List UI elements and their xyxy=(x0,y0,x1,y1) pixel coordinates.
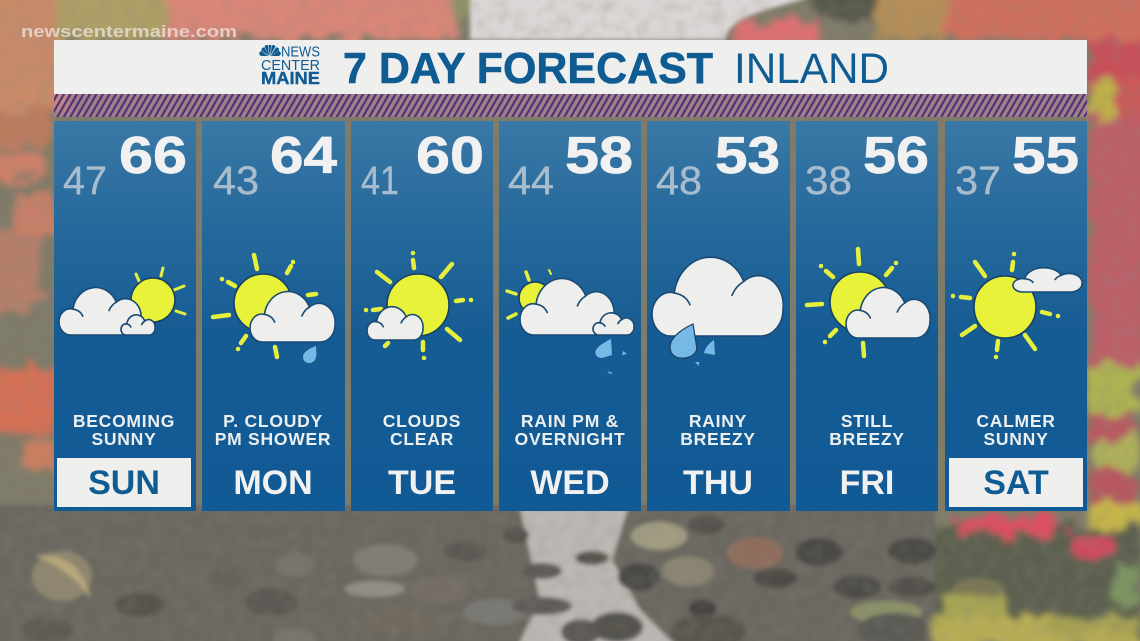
low temperature: 41 xyxy=(361,159,399,203)
logo: NBC News Center Maine xyxy=(259,44,320,88)
high temperature: 66 xyxy=(119,127,187,185)
watermark: newscentermaine.com: newscentermaine.com xyxy=(21,23,237,41)
panel: Monday: PM SHOWER xyxy=(215,429,331,449)
high temperature: 64 xyxy=(270,127,337,185)
icon: sun with thin cloud xyxy=(953,254,1082,357)
high temperature: 53 xyxy=(715,127,780,185)
logo: NBC News Center Maine: MAINE xyxy=(261,68,320,88)
title banner xyxy=(54,40,1087,94)
logo: NBC News Center Maine: CENTER xyxy=(261,57,320,74)
panel: Saturday: SUNNY xyxy=(983,429,1049,449)
high temperature: 56 xyxy=(863,127,929,185)
high temperature: 60 xyxy=(416,127,484,185)
icon: sun, cloud and shower xyxy=(213,255,335,363)
panel: Thursday: BREEZY xyxy=(680,429,756,449)
logo: NBC News Center Maine: NEWS xyxy=(281,44,320,60)
panel: Friday: BREEZY xyxy=(829,429,905,449)
low temperature: 44 xyxy=(508,159,554,203)
icon: sun behind clouds xyxy=(59,268,185,335)
panel: Saturday xyxy=(945,121,1087,511)
low temperature: 47 xyxy=(63,159,107,203)
panel: Tuesday: CLEAR xyxy=(390,429,454,449)
panel: Wednesday xyxy=(499,121,641,511)
low temperature: 37 xyxy=(955,159,1001,203)
heading: 7 day forecast: 7 DAY FORECAST xyxy=(343,44,713,93)
condition text: P. CLOUDY xyxy=(223,411,323,431)
hatched strip xyxy=(54,94,1087,117)
day label: TUE xyxy=(388,464,456,502)
panel: Sunday: SUNNY xyxy=(91,429,157,449)
condition text: STILL xyxy=(841,411,893,431)
panel: Sunday: SUN xyxy=(88,464,160,502)
panel: Monday xyxy=(202,121,345,511)
day label: MON xyxy=(233,464,313,502)
condition text: CALMER xyxy=(976,411,1056,431)
condition text: CLOUDS xyxy=(383,411,461,431)
panel: Thursday xyxy=(647,121,790,511)
panel: Wednesday: OVERNIGHT xyxy=(515,429,625,449)
day label box xyxy=(949,458,1083,507)
icon: clouds, sun and rain xyxy=(507,270,634,374)
high temperature: 58 xyxy=(565,127,633,185)
panel: Saturday: SAT xyxy=(983,464,1049,502)
icon: rain cloud xyxy=(652,257,783,366)
low temperature: 43 xyxy=(213,159,259,203)
day label: THU xyxy=(683,464,753,502)
icon: sun and cloud xyxy=(807,249,930,356)
condition text: RAIN PM & xyxy=(521,411,619,431)
icon: sun with small cloud xyxy=(366,253,471,358)
day label box xyxy=(57,458,191,507)
condition text: BECOMING xyxy=(73,411,175,431)
high temperature: 55 xyxy=(1012,127,1079,185)
day label: FRI xyxy=(840,464,894,502)
low temperature: 48 xyxy=(656,159,702,203)
panel: Friday xyxy=(796,121,938,511)
day label: WED xyxy=(530,464,610,502)
panel: Sunday xyxy=(54,121,196,511)
condition text: RAINY xyxy=(689,411,747,431)
sky gap xyxy=(470,0,812,40)
heading: inland: INLAND xyxy=(734,45,889,93)
low temperature: 38 xyxy=(805,159,852,203)
panel: Tuesday xyxy=(351,121,493,511)
